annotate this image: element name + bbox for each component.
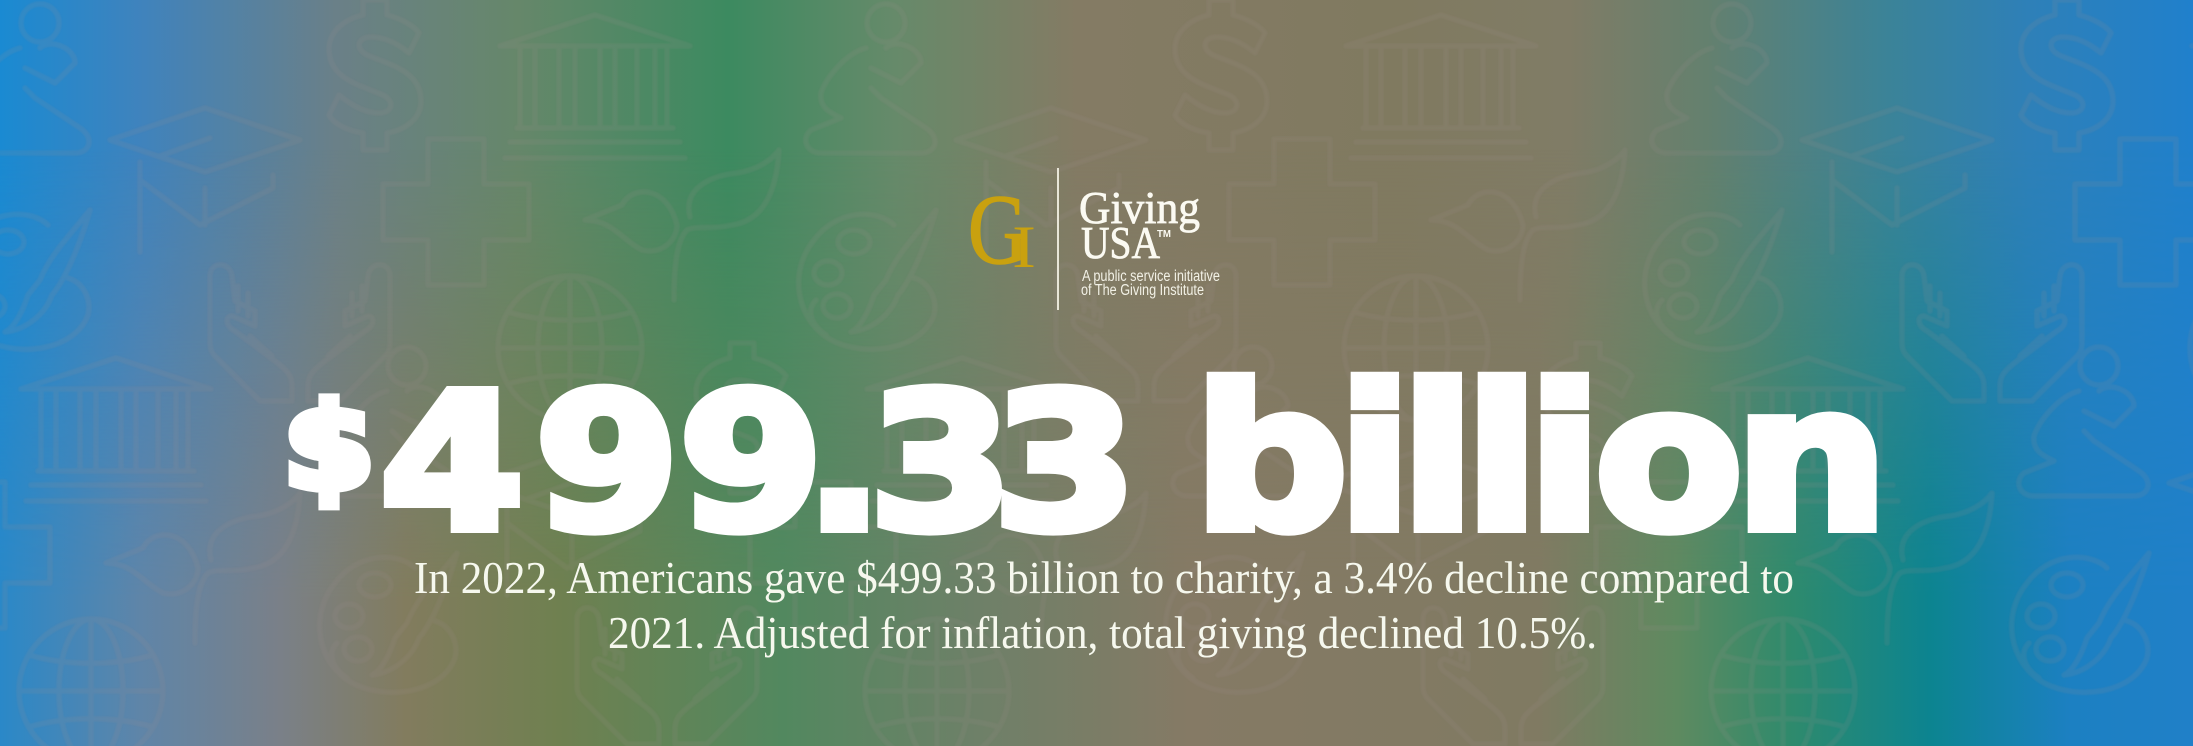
logo divider	[1057, 168, 1059, 310]
icon: GI monogram: G	[968, 174, 1028, 285]
title: $499.33 billion: 499.33	[380, 354, 1137, 573]
title: $499.33 billion: billion	[1194, 344, 1888, 575]
description text: 2021. Adjusted for inflation, total giving declined 10.5%.	[608, 607, 1597, 658]
title: $499.33 billion	[284, 344, 1888, 575]
logo wordmark	[1079, 182, 1200, 268]
icon: GI monogram: I	[1012, 214, 1036, 280]
logo tagline: of The Giving Institute	[1081, 282, 1204, 299]
logo tagline	[1081, 268, 1220, 299]
logo tagline: A public service initiative	[1082, 268, 1220, 285]
logo wordmark: Giving	[1079, 182, 1200, 233]
logo: Giving USA	[968, 168, 1220, 310]
description text: In 2022, Americans gave $499.33 billion to charity, a 3.4% decline compared to	[414, 552, 1794, 603]
logo wordmark: TM	[1157, 229, 1171, 240]
logo wordmark: USA	[1081, 217, 1160, 268]
description text	[414, 552, 1794, 658]
title: $499.33 billion: $	[284, 380, 374, 517]
